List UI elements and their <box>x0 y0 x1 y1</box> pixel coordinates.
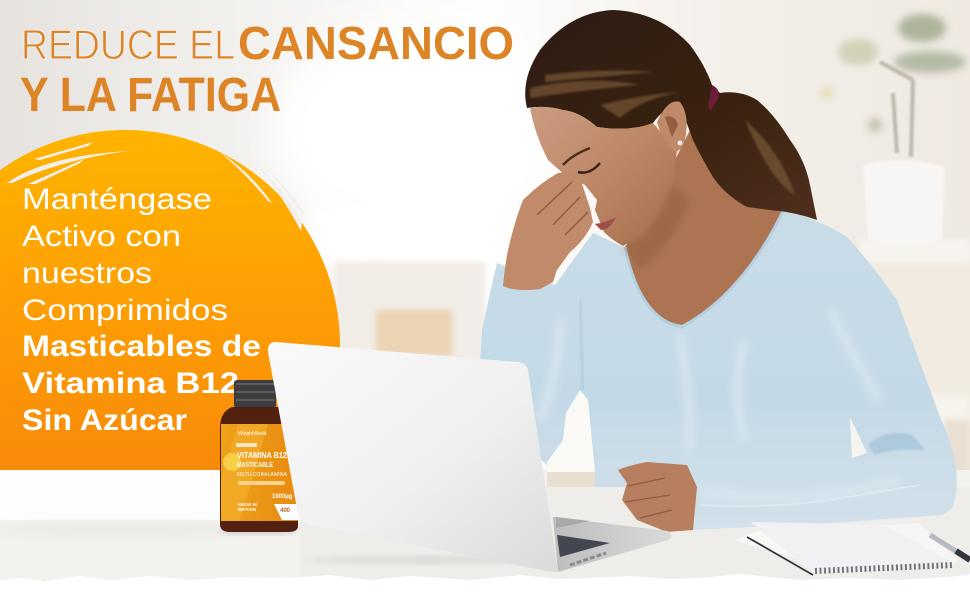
supplement bottle: 1000µg <box>272 494 293 500</box>
supplement bottle: BRITAIN <box>238 507 256 512</box>
sleeve creases <box>700 485 920 506</box>
body text in circle: Masticables de <box>22 330 261 363</box>
supplement bottle <box>218 380 298 534</box>
orange brush circle <box>0 130 340 470</box>
body text in circle: Manténgase <box>22 183 212 216</box>
body text in circle: Sin Azúcar <box>22 404 187 437</box>
laptop lid <box>268 342 558 572</box>
brow <box>563 148 590 165</box>
lips <box>595 217 616 230</box>
supplement bottle: METILCOBALAMINA <box>237 472 288 478</box>
gap between right arm and torso <box>850 417 867 458</box>
neck and chest <box>625 130 785 325</box>
jaw shadow <box>623 185 690 270</box>
body text in circle: Vitamina B12 <box>22 367 239 400</box>
laptop <box>268 342 672 572</box>
body text in circle: Comprimidos <box>22 294 228 327</box>
table <box>0 470 970 580</box>
shirt folds <box>540 310 900 498</box>
ponytail and hair <box>525 10 817 220</box>
face <box>530 107 677 246</box>
laptop base <box>553 517 672 572</box>
supplement bottle: VITAMINA B12 <box>237 451 288 460</box>
hair highlights <box>530 71 795 195</box>
body text in circle: nuestros <box>22 257 152 290</box>
title: REDUCE EL <box>21 21 235 68</box>
body text in circle: Activo con <box>22 220 181 253</box>
title: Y LA FATIGA <box>20 69 281 122</box>
woman <box>480 10 957 532</box>
collar <box>625 207 785 327</box>
supplement bottle: WeightWorld <box>238 431 267 437</box>
lower hand <box>618 462 697 532</box>
plant in white pot <box>821 14 966 245</box>
torn white bottom edge <box>0 574 970 600</box>
shirt <box>480 207 957 530</box>
supplement bottle: 400 <box>280 508 291 514</box>
brush strokes <box>7 142 306 231</box>
raised hand <box>503 172 593 290</box>
pen <box>930 535 970 560</box>
supplement bottle: MASTICABLE <box>237 462 273 469</box>
ear <box>657 101 687 151</box>
earring <box>678 140 682 146</box>
notebook and pen <box>735 522 970 575</box>
title: CANSANCIO <box>238 17 514 69</box>
hair tie <box>708 85 719 111</box>
supplement bottle: MADE IN <box>238 502 257 507</box>
ports <box>570 553 606 565</box>
eye <box>578 163 600 173</box>
title <box>20 17 514 122</box>
body text in circle <box>22 183 261 437</box>
gap between left arm and torso <box>547 390 595 472</box>
keyboard <box>557 535 610 557</box>
